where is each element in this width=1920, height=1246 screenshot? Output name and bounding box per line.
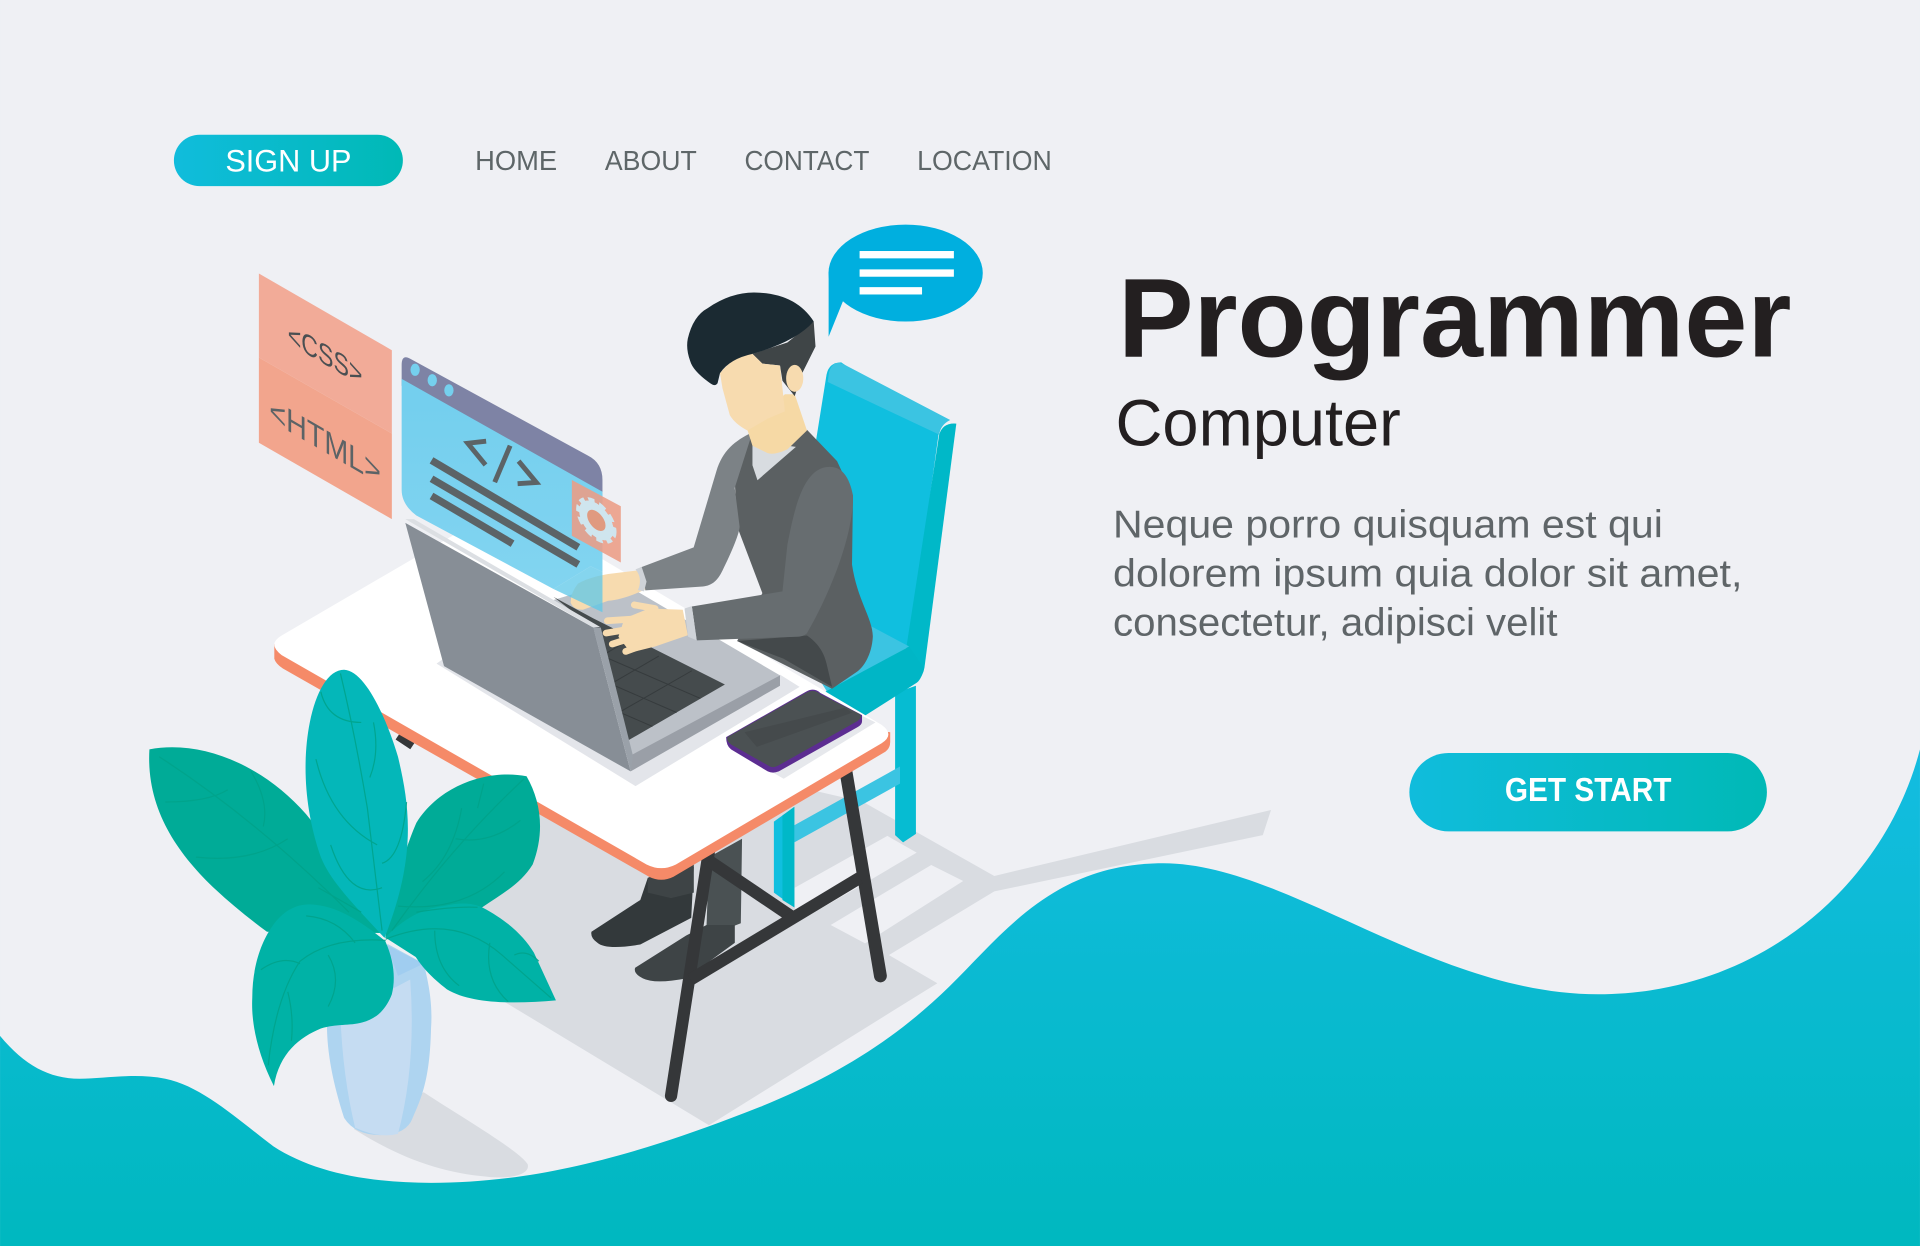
hair: [687, 293, 814, 385]
description paragraph: Neque porro quisquam est qui: [1113, 504, 1663, 547]
code symbol: [468, 441, 536, 484]
legs and shoes of programmer: [591, 839, 742, 981]
torso: [735, 430, 873, 689]
get start button: [1409, 753, 1767, 831]
programmer: [571, 293, 873, 689]
neck: [747, 394, 807, 454]
floating CSS and HTML panel: <HTML>: [269, 390, 381, 492]
back hair: [752, 321, 816, 396]
near cuff: [684, 606, 697, 640]
ear: [786, 365, 803, 392]
front left leaf: [252, 904, 394, 1086]
face: [720, 354, 785, 431]
description paragraph: dolorem ipsum quia dolor sit amet,: [1113, 553, 1742, 596]
hip: [737, 635, 832, 687]
far arm: [640, 432, 752, 590]
shirt collar: [752, 441, 796, 480]
near arm: [692, 467, 853, 640]
code lines: [432, 460, 578, 564]
hand overlay: [553, 566, 602, 612]
nav: menu links: ABOUT: [605, 145, 697, 176]
nav: menu links: HOME: [475, 145, 557, 176]
laptop: [405, 519, 800, 786]
settings gear panel: [572, 480, 621, 563]
back left leaf: [149, 747, 382, 933]
window dots: [410, 364, 454, 396]
tablet: [726, 690, 876, 779]
keyboard: [553, 597, 725, 740]
get start button: GET START: [1505, 772, 1671, 809]
subtitle: Computer: [1116, 387, 1401, 461]
background wave: [0, 749, 1920, 1246]
nav: sign up button: SIGN UP: [225, 142, 351, 178]
far cuff: [636, 567, 647, 591]
floor shadow of desk and chair: [465, 784, 1271, 1125]
desk legs: [398, 736, 880, 1096]
leaf veins: [159, 673, 551, 1065]
browser window: [402, 357, 621, 612]
plant pot: [327, 944, 431, 1135]
desk: [274, 503, 890, 880]
title: Programmer: [1118, 254, 1791, 380]
description paragraph: [1113, 504, 1742, 644]
description paragraph: consectetur, adipisci velit: [1113, 601, 1558, 644]
center leaf: [306, 670, 408, 938]
chair: [774, 362, 956, 907]
speech bubble: [828, 225, 983, 337]
near hand: [606, 605, 688, 653]
back right leaf: [385, 774, 540, 938]
nav: menu links: CONTACT: [744, 145, 869, 176]
nav: sign up button: [174, 135, 403, 186]
plant leaves: [149, 670, 556, 1086]
nav: menu links: LOCATION: [917, 145, 1052, 176]
front right leaf: [385, 903, 556, 1002]
plant pot shadow: [354, 1092, 528, 1177]
floating CSS and HTML panel: <CSS>: [288, 316, 362, 393]
floating CSS and HTML panel: [259, 274, 392, 519]
far hand: [571, 570, 645, 610]
nav: menu links: [475, 145, 1052, 176]
